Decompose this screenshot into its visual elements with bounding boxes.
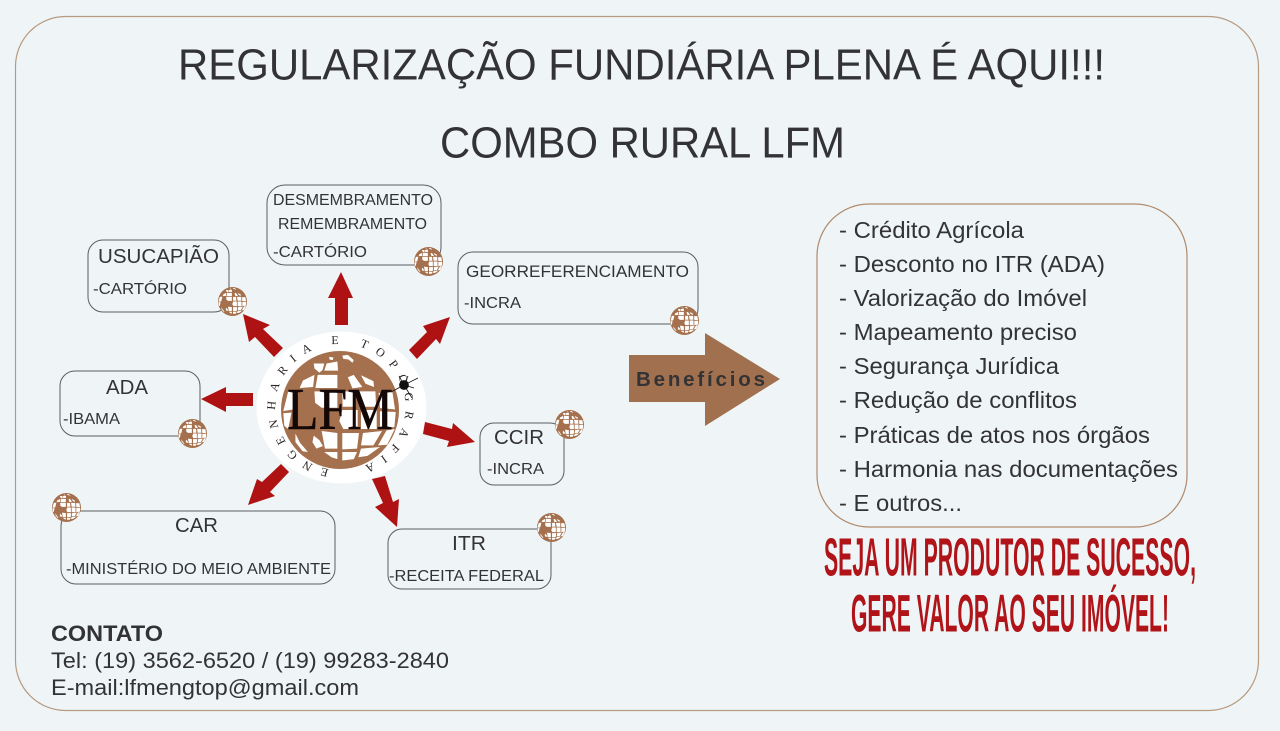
title: REGULARIZAÇÃO FUNDIÁRIA PLENA É AQUI!!!: [178, 40, 1105, 90]
label: receita federal: -RECEITA FEDERAL: [389, 568, 544, 585]
label: CAR: CAR: [175, 515, 218, 537]
icon: globe: [52, 493, 81, 522]
icon: globe: [537, 513, 566, 542]
label: ministério: -MINISTÉRIO DO MEIO AMBIENTE: [66, 559, 331, 578]
arrow: upper left to usucapião: [243, 314, 283, 357]
icon: globe: [670, 306, 699, 335]
list item: - E outros...: [839, 490, 962, 516]
label: cartório: -CARTÓRIO: [93, 279, 187, 298]
panel: ADA: [60, 371, 207, 448]
label: CCIR: CCIR: [494, 427, 544, 449]
icon: globe: [414, 247, 443, 276]
label: usucapião: USUCAPIÃO: [98, 244, 219, 268]
list item: - Valorização do Imóvel: [839, 285, 1087, 311]
icon: globe: [555, 410, 584, 439]
list item: - Crédito Agrícola: [839, 217, 1024, 243]
arrow: lower left to CAR: [248, 464, 289, 505]
label: ADA: ADA: [106, 377, 149, 399]
arrow: left to ADA: [201, 387, 253, 412]
icon: globe: [178, 419, 207, 448]
email: E-mail:lfmengtop@gmail.com: [51, 675, 359, 700]
logo ring text: ENGENHARIA E TOPOGRAFIA: [267, 336, 414, 477]
arrow: right to CCIR: [423, 422, 475, 447]
list item: - Práticas de atos nos órgãos: [839, 422, 1150, 448]
list item: - Mapeamento preciso: [839, 319, 1077, 345]
panel: CAR: [52, 493, 335, 584]
label: ITR: ITR: [452, 533, 486, 555]
panel: usucapião: [88, 240, 247, 316]
callout: produtor de sucesso: [824, 528, 1196, 644]
icon: globe: [218, 287, 247, 316]
logo star mark: [391, 376, 418, 398]
list item: - Harmonia nas documentações: [839, 456, 1178, 482]
panel: georreferenciamento: [458, 252, 699, 335]
panel: desmembramento: [267, 185, 443, 276]
arrow: lower right to ITR: [372, 476, 399, 527]
telephone: Tel: (19) 3562-6520 / (19) 99283-2840: [51, 648, 449, 673]
label: ibama: -IBAMA: [63, 411, 120, 428]
subtitle: COMBO RURAL LFM: [440, 118, 845, 168]
contact block: CONTATO: [51, 621, 163, 646]
label: benefícios: Benefícios: [636, 368, 765, 391]
label: incra: -INCRA: [464, 295, 521, 312]
panel: central logo: [256, 332, 426, 484]
arrow: benefícios: [629, 333, 780, 426]
panel: CCIR: [480, 410, 584, 485]
label: cartório: -CARTÓRIO: [273, 242, 367, 261]
contact block: [51, 621, 449, 700]
label: desmembramento: DESMEMBRAMENTO: [273, 192, 433, 209]
arrow: up to desmembramento: [328, 272, 353, 325]
logo white disc: [256, 332, 426, 484]
panel: benefits list: [817, 204, 1187, 527]
arrow: upper right to georreferenciamento: [409, 317, 450, 359]
list item: - Desconto no ITR (ADA): [839, 251, 1105, 277]
panel: ITR: [388, 513, 566, 589]
label: remembramento: REMEMBRAMENTO: [278, 216, 427, 233]
icon: logo globe: [281, 351, 399, 469]
label: incra: -INCRA: [487, 461, 544, 478]
list item: - Segurança Jurídica: [839, 353, 1059, 379]
logo letters LFM: LFM: [287, 376, 393, 442]
list item: - Redução de conflitos: [839, 387, 1077, 413]
label: georreferenciamento: GEORREFERENCIAMENTO: [466, 262, 689, 281]
